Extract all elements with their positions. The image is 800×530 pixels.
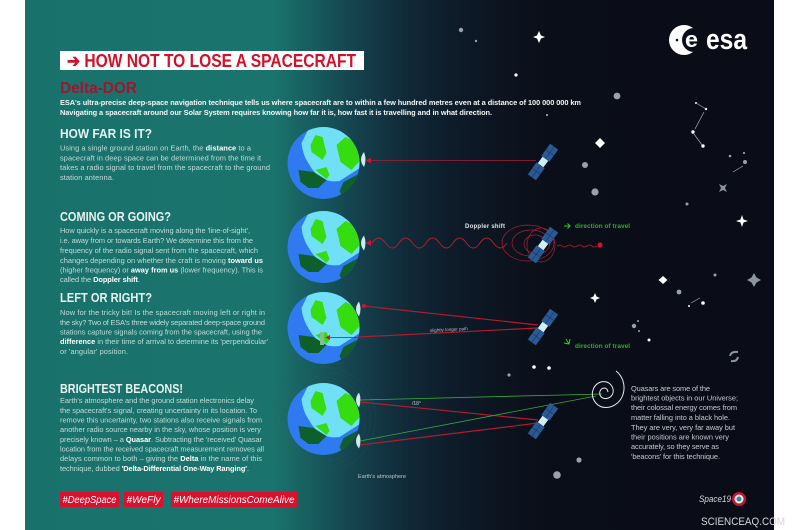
section: brightest beacons: remove this uncertainty, two stations also receive signals from xyxy=(60,416,262,424)
section: coming or going: called the Doppler shift. xyxy=(60,275,140,284)
section: left or right: or 'angular' position. xyxy=(60,347,128,356)
diagram: quasar beacons: /18° xyxy=(412,401,421,407)
section: coming or going: (higher frequency) or away from us (lower frequency). This is xyxy=(60,266,263,274)
starfield xyxy=(459,28,761,479)
logo: esa: esa xyxy=(706,24,748,56)
intro text: ESA's ultra-precise deep-space navigation technique tells us where spacecraft are to within a few hundred metres even at a distance of 100 000 000 km xyxy=(60,98,581,107)
quasar text: matter falling into a black hole. xyxy=(631,413,730,422)
section: brightest beacons: technique, dubbed 'Delta-Differential One-Way Ranging'. xyxy=(60,464,249,473)
section: left or right: stations capture signals coming from the spacecraft, using the xyxy=(60,328,262,336)
section: brightest beacons: another radio source nearby in the sky, whose position is very xyxy=(60,425,261,434)
hashtags xyxy=(60,492,297,507)
logo: esa xyxy=(669,24,748,56)
quasar text: Quasars are some of the xyxy=(631,384,710,393)
quasar text: 'beacons' for this technique. xyxy=(631,452,720,461)
label: direction of travel (lateral) xyxy=(564,339,630,350)
quasar text: their positions are known very xyxy=(631,432,729,442)
section: coming or going: changes depending on whether the craft is moving toward us xyxy=(60,256,263,265)
section: left or right: Now for the tricky bit! Is the spacecraft moving left or right in xyxy=(60,308,265,317)
diagram: left or right: slightly longer path xyxy=(430,326,468,333)
diagram: doppler xyxy=(288,211,602,283)
section: coming or going xyxy=(60,209,263,284)
quasar text: They are very, very far away but xyxy=(631,423,735,432)
hashtags: #DeepSpace xyxy=(62,495,117,506)
diagram: left or right xyxy=(288,292,558,364)
section: brightest beacons: location from the received spacecraft measurement removes all xyxy=(60,444,264,454)
icon: quasar spiral xyxy=(592,371,624,407)
section: left or right: difference in their time of arrival to determine its 'perpendicular' xyxy=(60,337,269,346)
intro text xyxy=(60,98,581,117)
section: brightest beacons: precisely known – a Quasar. Subtracting the 'received' Quasar xyxy=(60,435,263,444)
quasar text: brightest objects in our Universe; xyxy=(631,394,738,402)
diagram: doppler: Doppler shift xyxy=(465,224,505,230)
section: brightest beacons xyxy=(60,381,264,473)
section: brightest beacons: BRIGHTEST BEACONS! xyxy=(60,381,183,396)
watermark: SCIENCEAQ.COM xyxy=(701,516,785,528)
diagram: quasar beacons: Earth's atmosphere xyxy=(358,474,406,480)
section: how far is it: spacecraft in deep space can be determined from the time it xyxy=(60,154,261,162)
intro text: Navigating a spacecraft around our Solar System requires knowing how far it is, how fast it is travelling and in what direction. xyxy=(60,108,492,117)
logo: Space19 xyxy=(699,492,746,506)
title banner: ➔ HOW NOT TO LOSE A SPACECRAFT xyxy=(67,51,356,71)
section: coming or going: frequency of the radio signal sent from the spacecraft, which xyxy=(60,246,258,255)
quasar text: their colossal energy comes from xyxy=(631,403,737,412)
section: how far is it: station antenna. xyxy=(60,173,114,182)
section: left or right xyxy=(60,290,269,356)
diagram: quasar beacons xyxy=(272,367,602,480)
section: coming or going: How quickly is a spacecraft moving along the 'line-of-sight', xyxy=(60,226,250,235)
section: how far is it: HOW FAR IS IT? xyxy=(60,126,152,141)
label: direction of travel: direction of travel xyxy=(575,223,630,230)
section: brightest beacons: the spacecraft's signal, creating uncertainty in its location. To xyxy=(60,406,257,415)
quasar text: accurately, so they serve as xyxy=(631,442,719,451)
hashtags: #WeFly xyxy=(126,495,162,506)
section: brightest beacons: delays common to both – giving the Delta in the name of this xyxy=(60,454,262,463)
section: how far is it: Using a single ground station on Earth, the distance to a xyxy=(60,144,252,152)
section: brightest beacons: Earth's atmosphere and the ground station electronics delay xyxy=(60,396,254,405)
logo: esa: e xyxy=(685,27,698,52)
quasar text xyxy=(631,384,738,461)
hashtags: #WhereMissionsComeAlive xyxy=(174,495,295,506)
diagram: distance xyxy=(288,127,558,199)
section: how far is it: takes a radio signal to travel from the spacecraft to the ground xyxy=(60,163,270,172)
label: direction of travel (lateral): direction of travel xyxy=(575,343,630,350)
section: left or right: LEFT OR RIGHT? xyxy=(60,290,152,305)
section: left or right: the sky? Two of ESA's three widely separated deep-space ground xyxy=(60,318,265,327)
logo: Space19: Space19 xyxy=(699,494,732,505)
section: coming or going: COMING OR GOING? xyxy=(60,209,171,224)
section: coming or going: i.e. away from or towards Earth? We determine this from the xyxy=(60,236,253,245)
section: how far is it xyxy=(60,126,270,182)
heading: Delta-DOR: Delta-DOR xyxy=(60,80,137,97)
